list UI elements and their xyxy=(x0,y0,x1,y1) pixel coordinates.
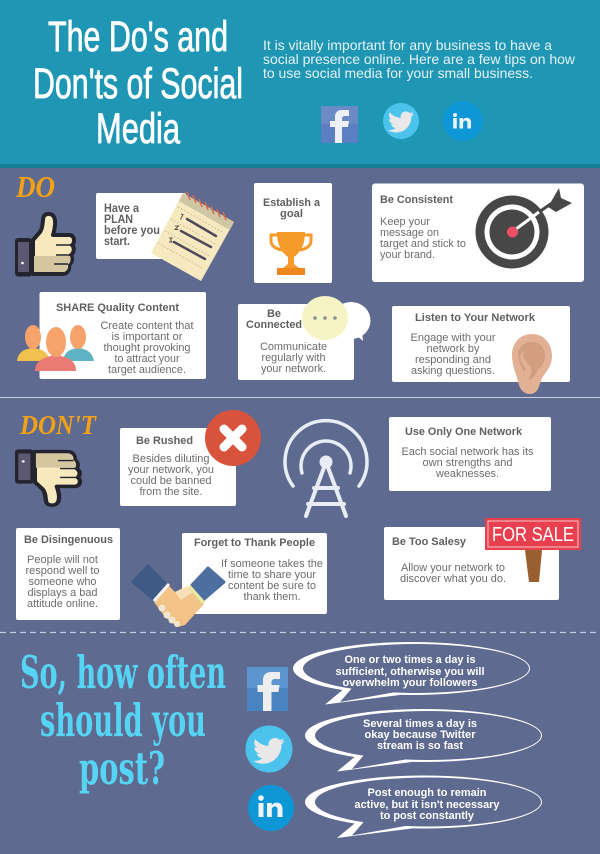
heading: be connected: Be xyxy=(267,308,281,320)
panel: use only one network xyxy=(389,417,551,491)
heading: DO: DO xyxy=(15,169,55,204)
text: be consistent: target and stick to xyxy=(380,238,466,250)
text: linkedin advice: active, but it isn't necessary xyxy=(354,799,500,811)
text: have a plan: PLAN xyxy=(104,212,133,226)
text: be disingenuous: attitude online. xyxy=(27,598,98,610)
text: use only one network: weaknesses. xyxy=(435,468,499,480)
text: forget to thank people: thank them. xyxy=(244,591,300,603)
text: be connected xyxy=(260,341,327,375)
text: forget to thank people xyxy=(221,558,323,603)
title: Media xyxy=(96,105,180,153)
text: share quality content xyxy=(100,320,194,376)
icon: linkedin large xyxy=(248,785,294,831)
text: share quality content: is important or xyxy=(112,331,183,343)
text: listen to your network: Engage with your xyxy=(410,332,496,344)
text: have a plan: start. xyxy=(104,234,130,248)
heading: be connected: Connected xyxy=(246,319,302,331)
title: The Do's and xyxy=(48,13,228,61)
icon: handshake xyxy=(133,566,224,627)
text: forget to thank people: content be sure to xyxy=(228,580,316,592)
text: have a plan: before you xyxy=(104,223,160,237)
intro text xyxy=(263,37,576,81)
text: facebook advice xyxy=(336,654,484,689)
icon: ear xyxy=(512,334,552,394)
text: be rushed: Besides diluting xyxy=(132,453,210,465)
text: linkedin advice: to post constantly xyxy=(380,810,475,822)
heading: how often: post? xyxy=(79,742,165,795)
icon: trophy xyxy=(271,232,311,275)
icon: notepad xyxy=(151,192,234,281)
text: share quality content: to attract your xyxy=(114,353,180,365)
text: twitter advice: Several times a day is xyxy=(363,718,477,730)
heading: forget to thank people: Forget to Thank People xyxy=(194,537,315,549)
icon: target xyxy=(476,188,572,268)
heading: how often: should you xyxy=(40,694,206,747)
title xyxy=(33,13,243,153)
text: be disingenuous: People will not xyxy=(27,554,98,566)
text: twitter advice xyxy=(363,718,477,752)
icon: twitter large xyxy=(246,726,292,772)
text: listen to your network: network by xyxy=(426,343,480,355)
speech bubble: facebook xyxy=(293,642,530,704)
panel: be connected xyxy=(238,296,370,380)
panel: be too salesy xyxy=(384,518,581,600)
heading: establish a goal: goal xyxy=(280,208,303,220)
panel: share quality content xyxy=(17,292,206,379)
heading: DON'T: DON'T xyxy=(19,410,97,440)
text: be too salesy xyxy=(400,562,506,585)
heading: listen to your network: Listen to Your Network xyxy=(415,312,536,324)
icon: antenna xyxy=(285,421,367,516)
panel: establish a goal xyxy=(254,183,332,283)
heading: be connected xyxy=(246,308,302,331)
text: twitter advice: okay because Twitter xyxy=(364,729,476,741)
text: share quality content: Create content that xyxy=(100,320,194,332)
icon: facebook large xyxy=(247,667,288,711)
icon: linkedin xyxy=(443,101,483,141)
icon: for sale sign: FOR SALE xyxy=(492,524,574,546)
text: linkedin advice xyxy=(354,787,500,822)
heading: share quality content: SHARE Quality Content xyxy=(56,302,179,314)
text: be too salesy: discover what you do. xyxy=(400,573,506,585)
icon: red x xyxy=(205,410,261,466)
text: share quality content: target audience. xyxy=(108,364,186,376)
icon: people xyxy=(17,325,94,371)
text: forget to thank people: If someone takes the xyxy=(221,558,323,570)
text: be disingenuous: someone who xyxy=(28,576,96,588)
text: listen to your network: asking questions. xyxy=(411,365,495,377)
text: use only one network xyxy=(402,446,534,480)
heading: how often: So, how often xyxy=(20,646,226,699)
text: be consistent: message on xyxy=(380,227,439,239)
text: have a plan: Have a xyxy=(104,201,139,215)
text: listen to your network: responding and xyxy=(415,354,491,366)
text: have a plan xyxy=(104,201,160,248)
text: use only one network: Each social network has its xyxy=(402,446,534,458)
heading: use only one network: Use Only One Network xyxy=(405,426,523,438)
text: be rushed: from the site. xyxy=(140,486,202,498)
text: be connected: regularly with xyxy=(262,352,326,364)
icon: twitter xyxy=(383,103,419,139)
text: facebook advice: One or two times a day is xyxy=(344,654,476,666)
text: facebook advice: sufficient, otherwise you will xyxy=(336,666,484,678)
text: share quality content: thought provoking xyxy=(104,342,190,354)
text: be disingenuous: respond well to xyxy=(26,565,100,577)
icon: thumbs down xyxy=(15,449,80,505)
heading: be too salesy: Be Too Salesy xyxy=(392,536,467,548)
text: twitter advice: stream is so fast xyxy=(377,740,463,752)
text: facebook advice: overwhelm your followers xyxy=(342,677,478,689)
heading: establish a goal: Establish a xyxy=(263,197,321,209)
text: linkedin advice: Post enough to remain xyxy=(368,787,487,799)
panel: be rushed xyxy=(120,410,261,506)
text: be connected: your network. xyxy=(261,363,326,375)
text: use only one network: own strengths and xyxy=(422,457,512,469)
text: forget to thank people: time to share your xyxy=(228,569,316,581)
text: be consistent: your brand. xyxy=(380,249,435,261)
icon: facebook xyxy=(321,106,358,143)
text: be disingenuous: displays a bad xyxy=(28,587,98,599)
text: be consistent xyxy=(380,216,466,261)
panel: forget to thank people xyxy=(133,533,327,627)
heading: be disingenuous: Be Disingenuous xyxy=(24,534,113,546)
text: be rushed: your network, you xyxy=(128,464,214,476)
text: be consistent: Keep your xyxy=(380,216,430,228)
text: be rushed xyxy=(128,453,214,498)
panel: have a plan xyxy=(96,192,234,281)
heading: be rushed: Be Rushed xyxy=(136,435,193,447)
intro text: social presence online. Here are a few tips on how xyxy=(263,51,576,67)
heading: establish a goal xyxy=(263,197,321,220)
speech bubble: twitter xyxy=(305,709,542,772)
text: be rushed: could be banned xyxy=(130,475,212,487)
text: be connected: Communicate xyxy=(260,341,327,353)
icon: for sale sign xyxy=(485,518,581,582)
heading: be consistent: Be Consistent xyxy=(380,194,453,206)
text: be too salesy: Allow your network to xyxy=(401,562,505,574)
icon: thumbs up xyxy=(15,214,74,276)
panel: be disingenuous xyxy=(16,528,120,620)
header band xyxy=(0,0,600,168)
intro text: to use social media for your small business. xyxy=(263,65,533,81)
speech bubble: linkedin xyxy=(305,776,542,838)
intro text: It is vitally important for any business to have a xyxy=(263,37,552,53)
text: be disingenuous xyxy=(26,554,100,610)
panel: listen to your network xyxy=(392,306,570,394)
text: listen to your network xyxy=(410,332,496,377)
panel: be consistent xyxy=(372,184,584,282)
title: Don'ts of Social xyxy=(33,60,243,108)
heading: how often xyxy=(20,646,226,795)
icon: speech bubbles xyxy=(302,296,370,341)
